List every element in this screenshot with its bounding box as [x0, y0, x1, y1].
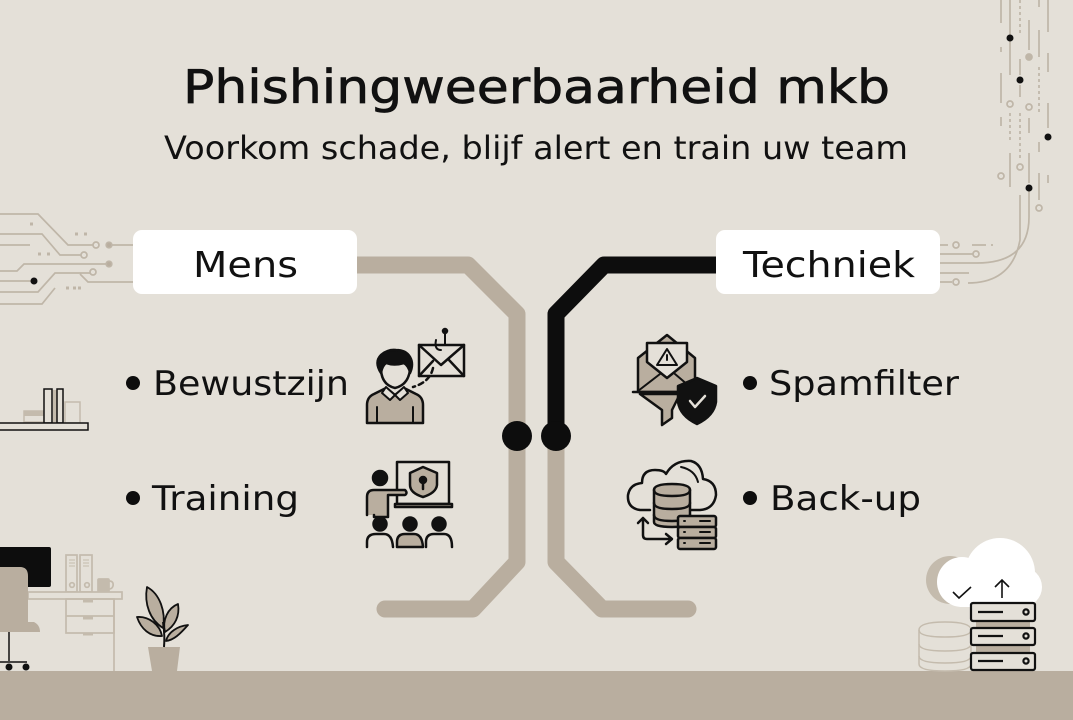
item: Bewustzijn: Bewustzijn: [153, 364, 349, 404]
icon: person with phishing mail: [367, 329, 464, 423]
connector: Techniek track lower: [556, 437, 688, 609]
item: Back-up: Back-up: [770, 479, 921, 519]
item: Training: Training: [151, 479, 299, 519]
icon: spam filter with shield: [633, 335, 716, 425]
subtitle: Voorkom schade, blijf alert en train uw team: [164, 129, 908, 167]
node: Mens: [502, 421, 532, 451]
circuit decoration: left: [0, 214, 133, 304]
node: Techniek: [541, 421, 571, 451]
panel: Techniek heading: Techniek: [742, 245, 915, 286]
connector: Mens track: [350, 265, 517, 609]
illustration: potted plant: [137, 587, 188, 671]
panel: Mens heading: Mens: [193, 245, 298, 286]
item: Spamfilter: Spamfilter: [769, 364, 959, 404]
illustration: cloud with server stack: [919, 538, 1042, 671]
circuit decoration: top right: [940, 0, 1052, 285]
title: Phishingweerbaarheid mkb: [183, 60, 890, 114]
connector: Techniek track upper: [556, 265, 720, 437]
illustration: desk with monitor and chair: [0, 547, 122, 671]
icon: security training: [367, 462, 452, 547]
panel: Mens heading: [133, 230, 357, 294]
floor band: [0, 671, 1073, 720]
illustration: bookshelf: [0, 389, 88, 430]
icon: cloud backup database: [628, 461, 716, 549]
panel: Techniek heading: [716, 230, 940, 294]
